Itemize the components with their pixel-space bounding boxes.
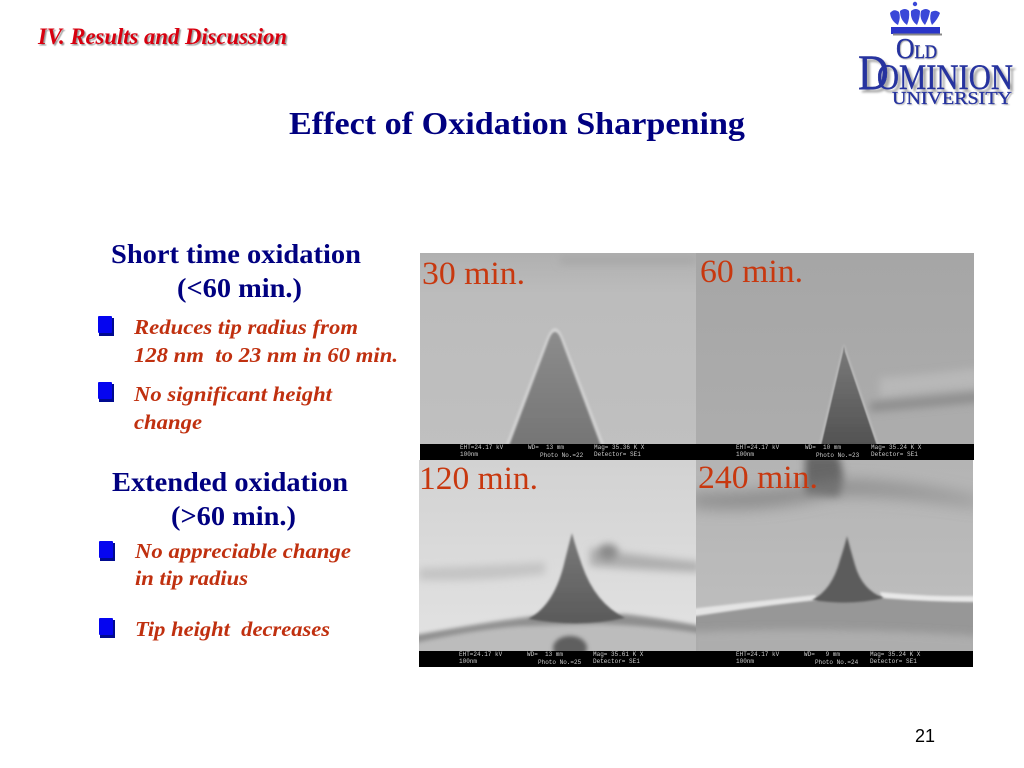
- micrograph: 240 min: EHT=24.17 kV: [736, 651, 780, 658]
- micrograph: 120 min: Mag= 35.61 K X: [593, 651, 644, 658]
- micrograph: 30 min: EHT=24.17 kV: [460, 444, 504, 451]
- bullet: no appreciable change: [99, 539, 351, 590]
- micrograph: 240 min: Detector= SE1: [870, 658, 917, 665]
- micrograph: 60 min: 100nm: [736, 451, 754, 458]
- micrograph: 60 min: Detector= SE1: [871, 451, 918, 458]
- micrograph: 240 min: Mag= 35.24 K X: [870, 651, 921, 658]
- logo: Old Dominion University: OLD: [897, 34, 938, 66]
- panel: short time oxidation: [98, 239, 398, 434]
- panel: extended oxidation: [99, 467, 351, 641]
- micrograph: 30 min: 100nm: [460, 451, 478, 458]
- bullet: reduces tip radius: 128 nm to 23 nm in 60 min.: [134, 343, 398, 367]
- micrograph: 30 min: [420, 253, 696, 460]
- micrograph: 240 min: WD= 9 mm: [804, 651, 840, 658]
- micrograph: 60 min: [696, 253, 980, 460]
- micrograph: 240 min: Photo No.=24: [815, 659, 859, 666]
- micrograph: 120 min: Detector= SE1: [593, 658, 640, 665]
- micrograph: 120 min: [410, 460, 705, 667]
- bullet: no significant height change: [98, 382, 333, 434]
- section header: IV. Results and Discussion: [37, 24, 287, 49]
- micrograph: 120 min: Photo No.=25: [538, 659, 582, 666]
- micrograph: 60 min: Photo No.=23: [816, 452, 860, 459]
- heading: extended oxidation: Extended oxidation: [112, 467, 348, 497]
- micrograph: 240 min: [690, 455, 980, 667]
- micrograph: 30 min: WD= 13 mm: [528, 444, 564, 451]
- logo: Old Dominion University: OLD: [896, 33, 937, 65]
- heading: short time oxidation: (<60 min.): [177, 273, 302, 303]
- logo: Old Dominion University: UNIVERSITY: [892, 88, 1012, 108]
- micrograph: 120 min: WD= 13 mm: [527, 651, 563, 658]
- page number: 21: [915, 726, 935, 746]
- title: Effect of Oxidation Sharpening: [289, 105, 745, 141]
- icon: crown: [890, 2, 942, 36]
- heading: extended oxidation: (>60 min.): [171, 501, 296, 531]
- heading: short time oxidation: Short time oxidation: [111, 239, 361, 269]
- micrograph: 120 min: EHT=24.17 kV: [459, 651, 503, 658]
- bullet: no significant height change: No significant height: [133, 382, 333, 406]
- label: 120 min.: 120 min.: [419, 461, 538, 497]
- label: 240 min.: 240 min.: [698, 460, 818, 496]
- logo: Old Dominion University: [858, 2, 1016, 109]
- label: 30 min.: 30 min.: [422, 256, 525, 292]
- micrograph: 60 min: EHT=24.17 kV: [736, 444, 780, 451]
- bullet: reduces tip radius: [98, 315, 398, 367]
- logo: Old Dominion University: UNIVERSITY: [893, 89, 1014, 109]
- micrograph: 60 min: Mag= 35.24 K X: [871, 444, 922, 451]
- bullet: no significant height change: change: [134, 410, 202, 434]
- section header: IV. Results and Discussion: [39, 26, 289, 50]
- micrograph: 60 min: WD= 10 mm: [805, 444, 841, 451]
- micrograph: 120 min: 100nm: [459, 658, 477, 665]
- micrograph: 30 min: Mag= 35.36 K X: [594, 444, 645, 451]
- micrograph: 30 min: Detector= SE1: [594, 451, 641, 458]
- bullet: no appreciable change: in tip radius: [135, 566, 248, 590]
- micrograph: 30 min: Photo No.=22: [540, 452, 584, 459]
- label: 60 min.: 60 min.: [700, 254, 803, 290]
- heading: extended oxidation: [112, 467, 348, 531]
- heading: short time oxidation: [111, 239, 361, 303]
- bullet: tip height decreases: Tip height decreases: [135, 617, 330, 641]
- bullet: reduces tip radius: Reduces tip radius from: [133, 315, 358, 339]
- bullet: no appreciable change: No appreciable change: [134, 539, 351, 563]
- micrograph: 240 min: 100nm: [736, 658, 754, 665]
